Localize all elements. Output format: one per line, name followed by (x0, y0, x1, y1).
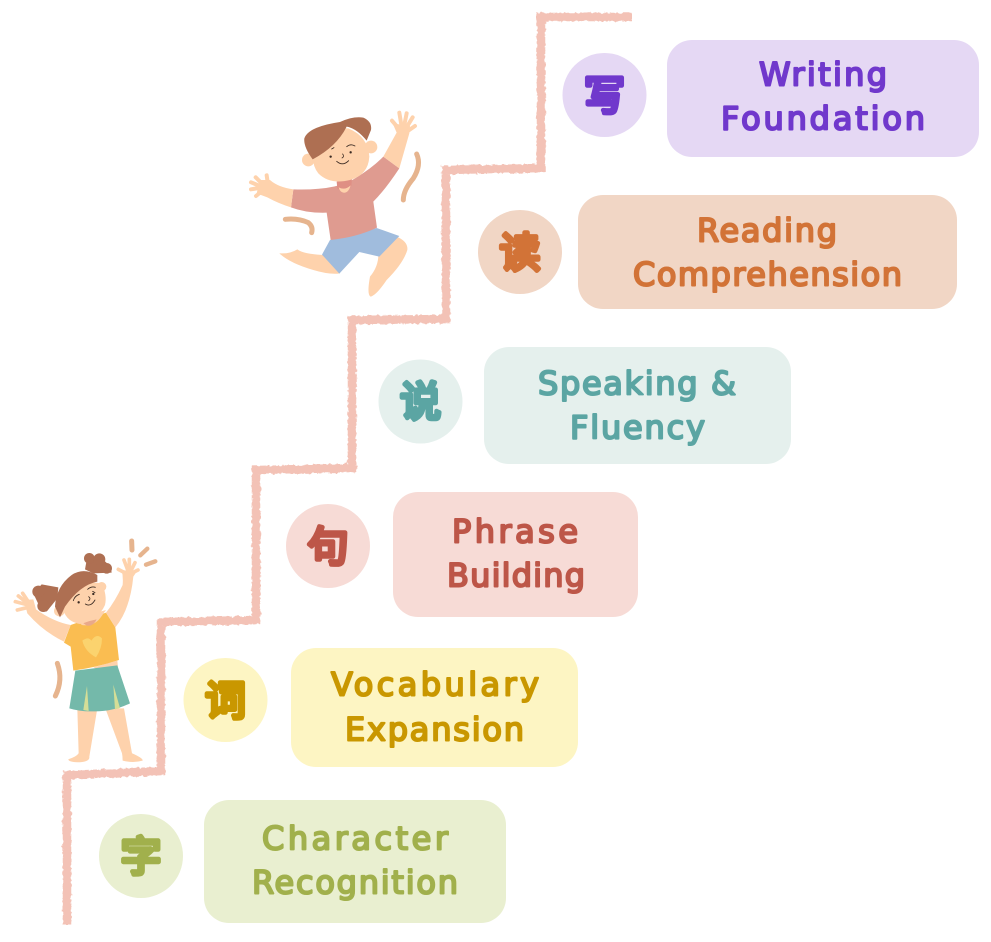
label: writing foundation (667, 40, 979, 157)
label: speaking and fluency: Speaking & (538, 364, 736, 402)
icon: character recognition glyph (99, 814, 183, 898)
icon: phrase character (286, 504, 370, 588)
label: phrase building: Building (447, 556, 585, 594)
step 3: phrase building (286, 492, 638, 617)
step 2: vocabulary expansion (184, 648, 578, 767)
step 1: character recognition (99, 800, 506, 923)
icon: phrase character: 句 (308, 524, 348, 570)
label: phrase building (393, 492, 638, 617)
label: vocabulary expansion: Expansion (345, 710, 524, 748)
icon: vocabulary character (184, 658, 268, 742)
icon: reading character: 读 (500, 230, 540, 276)
label: phrase building: Phrase (452, 512, 578, 550)
label: writing foundation: Foundation (721, 100, 925, 138)
label: vocabulary expansion: Vocabulary (331, 666, 539, 704)
icon: character recognition glyph: 字 (120, 834, 162, 880)
label: reading comprehension (578, 195, 957, 309)
label: reading comprehension: Reading (697, 212, 837, 250)
illustration: jumping boy (251, 113, 419, 297)
step 4: speaking and fluency (378, 347, 791, 464)
icon: reading character (478, 210, 562, 294)
label: writing foundation: Writing (759, 56, 887, 94)
label: character recognition (204, 800, 506, 923)
illustration: waving girl (15, 541, 155, 762)
icon: vocabulary character: 词 (205, 678, 246, 724)
icon: speaking character (378, 360, 462, 444)
icon: writing character: 写 (584, 73, 625, 119)
label: character recognition: Character (262, 820, 449, 858)
label: vocabulary expansion (291, 648, 578, 767)
label: speaking and fluency: Fluency (570, 408, 705, 446)
label: character recognition: Recognition (252, 864, 458, 902)
label: speaking and fluency (484, 347, 791, 464)
label: reading comprehension: Comprehension (633, 256, 902, 294)
step 6: writing foundation (562, 40, 979, 157)
staircase line (67, 17, 632, 925)
icon: writing character (562, 53, 646, 137)
icon: speaking character: 说 (400, 379, 441, 425)
step 5: reading comprehension (478, 195, 957, 309)
